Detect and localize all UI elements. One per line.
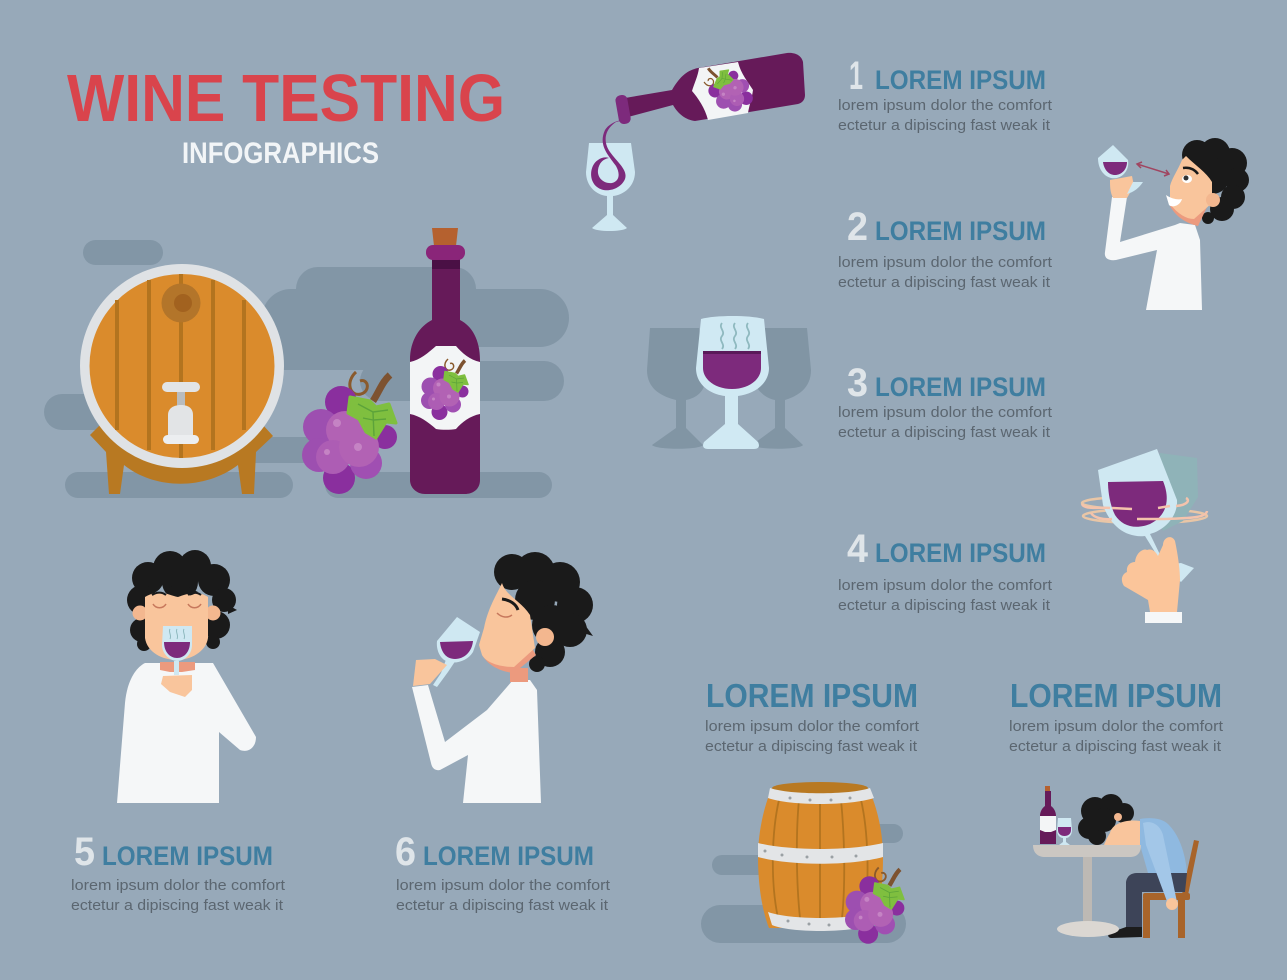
- step 5 text: ectetur a dipiscing fast weak it: [71, 897, 284, 914]
- standing barrel with grapes: [701, 782, 906, 944]
- step 6 text: [396, 877, 611, 914]
- step 2 text: ectetur a dipiscing fast weak it: [838, 274, 1051, 291]
- jaw shadow: [482, 645, 536, 673]
- bottle label: [692, 62, 753, 120]
- shirt and raised arm: [1105, 197, 1202, 310]
- step 3 text: lorem ipsum dolor the comfort: [838, 404, 1053, 421]
- swirl marks front: [1082, 498, 1207, 519]
- step 5 heading: [74, 830, 273, 874]
- label grapes: [699, 65, 758, 115]
- man asleep at table: [1033, 786, 1199, 938]
- barrel stand: [90, 412, 273, 494]
- step 2 text: [838, 254, 1053, 291]
- hand: [1110, 176, 1134, 198]
- barrel top: [772, 782, 868, 794]
- lower right heading block: [1009, 677, 1224, 755]
- glass bowl and stem: [1098, 449, 1194, 582]
- right ear: [206, 606, 220, 620]
- step 4 heading: [847, 527, 1046, 571]
- step 5 heading: LOREM IPSUM: [102, 841, 273, 871]
- step 4 swirling glass in hand: [1082, 449, 1207, 623]
- man tasting wine: [412, 552, 593, 803]
- step 3 heading: LOREM IPSUM: [875, 372, 1046, 402]
- wine: [1108, 481, 1167, 527]
- lower right heading block: ectetur a dipiscing fast weak it: [1009, 738, 1222, 755]
- brows and eyes: [152, 593, 201, 608]
- step 1 heading: LOREM IPSUM: [875, 65, 1046, 95]
- grapes: [845, 868, 904, 944]
- glass: [586, 143, 635, 231]
- step 1 heading: [849, 54, 1046, 98]
- barrel bands: [758, 788, 883, 931]
- shadow glasses: [647, 328, 811, 449]
- step 5 text: lorem ipsum dolor the comfort: [71, 877, 286, 894]
- step 3 heading: [847, 361, 1046, 405]
- step 6 text: lorem ipsum dolor the comfort: [396, 877, 611, 894]
- shadow glass: [1150, 453, 1198, 531]
- shirt: [1140, 818, 1187, 873]
- step 4 text: ectetur a dipiscing fast weak it: [838, 597, 1051, 614]
- hair: [1182, 138, 1249, 224]
- wine bottle: [410, 228, 480, 494]
- step 4 heading: LOREM IPSUM: [875, 538, 1046, 568]
- hand: [413, 659, 447, 686]
- step 3 glasses: [647, 316, 811, 449]
- step 4 heading: 4: [847, 527, 869, 571]
- smile: [1166, 195, 1182, 206]
- hair: [127, 550, 237, 651]
- cuff: [1145, 612, 1182, 623]
- face: [1104, 821, 1140, 845]
- lower left heading block: LOREM IPSUM: [706, 677, 918, 714]
- step 6 heading: [395, 830, 594, 874]
- forehead curl: [166, 582, 198, 595]
- front glass: [696, 316, 769, 449]
- jaw and neck shadow: [1170, 205, 1208, 226]
- step 1 heading: 1: [849, 54, 863, 98]
- step 1 text: [838, 97, 1053, 134]
- man looking at glass: [1098, 138, 1249, 310]
- step 3 text: ectetur a dipiscing fast weak it: [838, 424, 1051, 441]
- step 3 text: [838, 404, 1053, 441]
- step 3 heading: 3: [847, 361, 868, 405]
- title: WINE TESTING: [67, 61, 505, 136]
- face: [145, 593, 208, 660]
- step 1 text: lorem ipsum dolor the comfort: [838, 97, 1053, 114]
- step 1 text: ectetur a dipiscing fast weak it: [838, 117, 1051, 134]
- face: [479, 583, 535, 667]
- hand: [161, 675, 192, 697]
- step 6 text: ectetur a dipiscing fast weak it: [396, 897, 609, 914]
- eye and brow: [1182, 168, 1198, 183]
- table: [1033, 845, 1141, 937]
- lower right heading block: lorem ipsum dolor the comfort: [1009, 718, 1224, 735]
- barrel body: [758, 788, 883, 928]
- staves: [773, 800, 868, 918]
- pouring bottle and glass: [586, 53, 805, 231]
- shirt: [117, 663, 256, 803]
- neck: [510, 668, 528, 682]
- hanging arm: [1143, 822, 1177, 904]
- wine stream: [591, 120, 626, 190]
- step 2 heading: 2: [847, 205, 868, 249]
- trousers: [1126, 873, 1187, 928]
- man smelling wine: [117, 550, 256, 803]
- grapes: [302, 372, 397, 494]
- small glass: [1057, 818, 1072, 845]
- hand: [1166, 898, 1178, 910]
- glass at nose: [162, 626, 192, 675]
- step 4 text: lorem ipsum dolor the comfort: [838, 577, 1053, 594]
- hand: [1122, 537, 1180, 612]
- background shadow shapes: [44, 240, 569, 498]
- step 2 heading: LOREM IPSUM: [875, 216, 1046, 246]
- barrel: [80, 264, 284, 468]
- step 5 text: [71, 877, 286, 914]
- band rivets: [764, 796, 858, 926]
- lower left heading block: lorem ipsum dolor the comfort: [705, 718, 920, 735]
- small bottle: [1040, 786, 1056, 844]
- shirt and arm: [412, 680, 541, 803]
- neck: [160, 662, 195, 672]
- step 5 heading: 5: [74, 830, 95, 874]
- lower left heading block: [705, 677, 920, 755]
- left ear: [132, 606, 148, 620]
- shadow shapes: [701, 824, 906, 943]
- tilted bottle: [625, 53, 805, 121]
- step 4 text: [838, 577, 1053, 614]
- ear: [1206, 193, 1220, 207]
- steam: [721, 323, 749, 349]
- step 6 heading: LOREM IPSUM: [423, 841, 594, 871]
- step 2 heading: [847, 205, 1046, 249]
- hair: [494, 552, 593, 672]
- main illustration: barrel, grapes and bottle: [44, 228, 569, 498]
- subtitle: INFOGRAPHICS: [182, 137, 379, 170]
- face: [1170, 156, 1212, 219]
- lower right heading block: LOREM IPSUM: [1010, 677, 1222, 714]
- wine: [703, 352, 761, 389]
- ear: [536, 628, 554, 646]
- sight arrow: [1137, 162, 1169, 176]
- ear: [1114, 813, 1122, 821]
- lower left heading block: ectetur a dipiscing fast weak it: [705, 738, 918, 755]
- swirl rings back: [1082, 497, 1207, 523]
- step 2 text: lorem ipsum dolor the comfort: [838, 254, 1053, 271]
- glass: [433, 617, 480, 687]
- hair: [1078, 794, 1134, 845]
- brow and eye: [497, 599, 518, 617]
- shoe: [1108, 927, 1142, 938]
- tilted glass: [1098, 145, 1143, 194]
- step 6 heading: 6: [395, 830, 416, 874]
- chair: [1143, 840, 1199, 938]
